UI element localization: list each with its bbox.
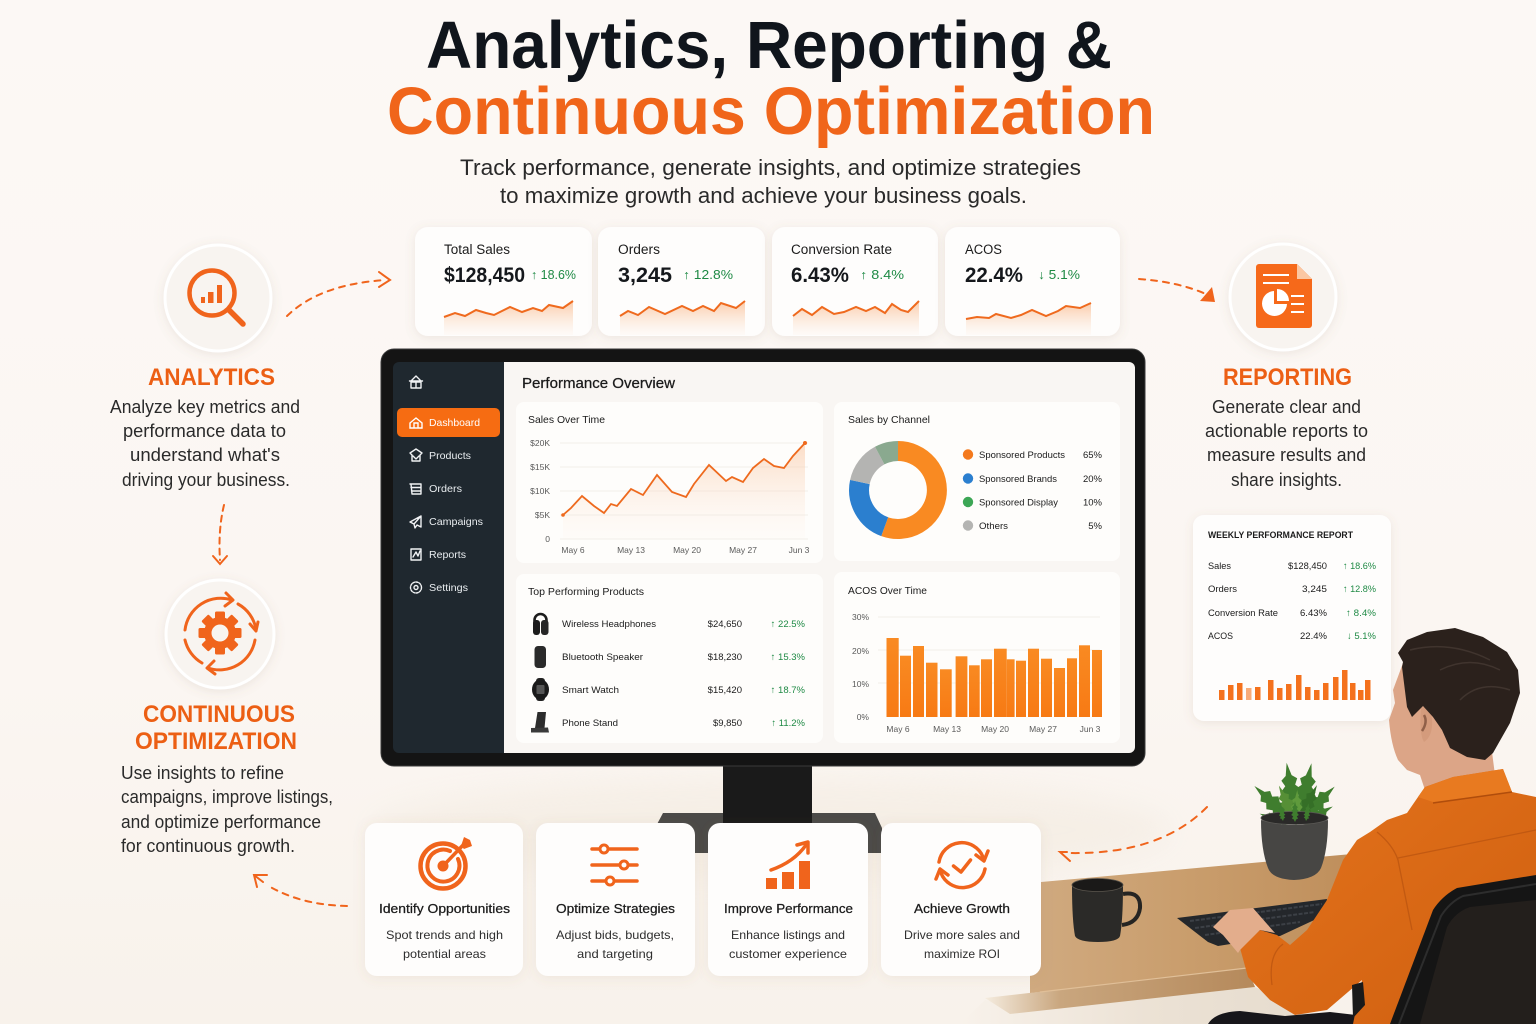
products nav: Products (429, 450, 471, 462)
product rows: Phone Stand (562, 718, 618, 729)
card: optimize strategies: Adjust bids, budgets, (556, 928, 674, 942)
heading: continuous optimization: CONTINUOUS (143, 701, 295, 728)
KPI card: orders (598, 227, 765, 336)
dashboard nav active (397, 408, 500, 437)
text: continuous optimization description: and optimize performance (121, 812, 321, 832)
heading: continuous optimization (135, 701, 297, 755)
panel: ACOS over time: 10% (852, 679, 869, 689)
report table: Conversion Rate (1208, 608, 1278, 619)
sidebar (393, 362, 504, 753)
heading: reporting: REPORTING (1223, 364, 1352, 391)
panel: top performing products: Top Performing Products (528, 586, 644, 598)
legend: Sponsored Products (979, 450, 1065, 461)
panel: sales over time: May 27 (729, 545, 757, 555)
panel: analytics (110, 245, 300, 490)
panel: sales over time: $5K (535, 510, 550, 520)
panel: sales over time: $20K (530, 438, 550, 448)
text: continuous optimization description: for continuous growth. (121, 836, 295, 856)
text: analytics description (110, 397, 300, 490)
monitor stand (655, 764, 882, 853)
person hand (1213, 908, 1275, 953)
panel: sales by channel (834, 402, 1120, 561)
card: improve performance: customer experience (729, 947, 847, 961)
panel: ACOS over time: 30% (852, 612, 869, 622)
KPI card: total sales: ↑ 18.6% (531, 268, 576, 282)
card: identify opportunities: Identify Opportunities (379, 902, 510, 916)
report table: ACOS (1208, 631, 1233, 642)
subtitle: to maximize growth and achieve your business goals. (500, 183, 1027, 208)
panel: ACOS over time (834, 572, 1120, 743)
product rows: ↑ 11.2% (771, 718, 806, 729)
panel: sales over time (516, 402, 823, 563)
product rows: $24,650 (708, 619, 742, 630)
legend: 20% (1083, 474, 1103, 485)
person hair (1398, 628, 1520, 760)
card: achieve growth: Achieve Growth (914, 902, 1010, 916)
product rows: Bluetooth Speaker (562, 652, 643, 663)
arrow: KPI cards to reporting (1139, 279, 1215, 302)
panel: ACOS over time: May 20 (981, 724, 1009, 734)
icon: growth chart (766, 842, 810, 889)
panel: sales over time: $15K (530, 462, 550, 472)
panel: sales over time: Sales Over Time (528, 414, 605, 426)
office chair (1352, 875, 1536, 1024)
legend: 65% (1083, 450, 1103, 461)
campaigns nav: Campaigns (429, 516, 483, 528)
report table: ↓ 5.1% (1347, 631, 1377, 642)
KPI card: total sales: Total Sales (444, 242, 510, 257)
text: analytics description: Analyze key metrics and (110, 397, 300, 417)
KPI card: total sales (415, 227, 592, 336)
product rows: Wireless Headphones (562, 619, 656, 630)
product rows: ↑ 18.7% (771, 685, 806, 696)
report table: ↑ 8.4% (1346, 608, 1377, 619)
KPI card: ACOS: ↓ 5.1% (1038, 268, 1080, 282)
product rows: ↑ 15.3% (771, 652, 806, 663)
text: analytics description: understand what's (130, 445, 280, 465)
panel: ACOS over time: 20% (852, 646, 869, 656)
card: improve performance: Enhance listings and (731, 928, 845, 942)
legend: 10% (1083, 498, 1103, 508)
person thigh (1208, 1011, 1356, 1024)
legend (963, 449, 1103, 532)
title (387, 8, 1155, 149)
panel: ACOS over time: ACOS Over Time (848, 585, 927, 597)
reports nav (411, 549, 466, 561)
text: reporting description: share insights. (1231, 470, 1342, 490)
heading: continuous optimization: OPTIMIZATION (135, 728, 297, 755)
text: continuous optimization description (121, 763, 333, 856)
icon: report document (1230, 244, 1336, 350)
card: identify opportunities: Spot trends and high (386, 928, 503, 942)
panel: sales over time: May 6 (561, 545, 585, 555)
orders nav (410, 483, 462, 495)
report table: ↑ 12.8% (1343, 584, 1377, 595)
legend: Others (979, 521, 1008, 532)
main content area (504, 362, 1135, 753)
legend: Sponsored Display (979, 498, 1058, 508)
icon: keyboard (1177, 899, 1327, 946)
panel: weekly performance report: WEEKLY PERFORMANCE REPORT (1208, 530, 1353, 541)
text: reporting description: measure results and (1207, 445, 1366, 465)
text: reporting description: Generate clear and (1212, 397, 1361, 417)
text: continuous optimization description: Use insights to refine (121, 763, 284, 783)
card: optimize strategies: and targeting (577, 947, 653, 961)
arrow: cards to continuous optimization (254, 875, 347, 906)
report table: 6.43% (1300, 608, 1328, 619)
card: optimize strategies (536, 823, 695, 976)
settings nav: Settings (429, 582, 468, 594)
icon: magnifier (165, 245, 271, 351)
product rows: $9,850 (713, 718, 742, 729)
panel: bottom step cards (365, 823, 1041, 976)
panel: sales over time: May 20 (673, 545, 701, 555)
icon: phone stand (531, 712, 549, 732)
KPI card: orders: ↑ 12.8% (683, 268, 733, 282)
KPI card: total sales: $128,450 (444, 264, 525, 287)
product rows: ↑ 22.5% (771, 619, 806, 630)
person ear (1420, 707, 1432, 742)
panel: sales over time: Jun 3 (789, 545, 810, 555)
product rows (562, 619, 806, 729)
text: reporting description (1205, 397, 1368, 490)
icon: headphones (533, 614, 548, 635)
icon: target (420, 837, 472, 888)
report table (1208, 561, 1377, 642)
panel: ACOS over time: May 27 (1029, 724, 1057, 734)
product rows: Smart Watch (562, 685, 619, 696)
heading: analytics: ANALYTICS (148, 364, 275, 391)
desk (960, 854, 1352, 1024)
ACOS bar chart (886, 638, 1102, 717)
text: analytics description: performance data to (123, 421, 286, 441)
card: improve performance: Improve Performance (724, 902, 853, 916)
panel: ACOS over time: May 6 (886, 724, 910, 734)
card: improve performance (708, 823, 868, 976)
KPI card: ACOS (945, 227, 1120, 336)
arrow: analytics to continuous optimization (213, 505, 227, 564)
title: Continuous Optimization (387, 74, 1155, 149)
KPI card: ACOS: 22.4% (965, 264, 1023, 287)
product rows: $18,230 (708, 652, 742, 663)
heading: performance overview: Performance Overview (522, 376, 676, 392)
legend: Sponsored Brands (979, 474, 1057, 485)
products nav (410, 449, 471, 462)
panel: top performing products (516, 574, 823, 743)
donut chart (859, 451, 937, 529)
panel: sales over time: $10K (530, 486, 550, 496)
reports nav: Reports (429, 549, 466, 561)
subtitle (460, 155, 1081, 208)
panel: sales over time: 0 (545, 534, 550, 544)
report table: ↑ 18.6% (1343, 561, 1377, 572)
icon: smart watch (532, 678, 549, 701)
icon: speaker (534, 646, 546, 668)
KPI card: conversion rate: Conversion Rate (791, 242, 892, 257)
legend: 5% (1088, 521, 1103, 532)
arrow: person to cards (1060, 807, 1207, 861)
card: identify opportunities: potential areas (403, 947, 486, 961)
icon: gear with cycle arrows (166, 580, 274, 688)
text: analytics description: driving your business. (122, 470, 290, 490)
title: Analytics, Reporting & (426, 8, 1112, 83)
KPI card: ACOS: ACOS (965, 242, 1002, 257)
card: achieve growth: Drive more sales and (904, 928, 1020, 942)
report bar chart (1219, 670, 1370, 700)
subtitle: Track performance, generate insights, and optimize strategies (460, 155, 1081, 180)
icon: cycle check (936, 843, 988, 888)
arrow: analytics to KPI cards (287, 272, 390, 316)
settings nav (410, 582, 468, 594)
panel: continuous optimization (121, 580, 333, 856)
panel: ACOS over time: May 13 (933, 724, 961, 734)
panel: reporting (1205, 244, 1368, 490)
panel: sales over time: May 13 (617, 545, 645, 555)
monitor (381, 349, 1145, 766)
KPI card: conversion rate: 6.43% (791, 264, 849, 287)
person shirt (1240, 769, 1536, 1024)
person neck and face (1389, 660, 1495, 790)
orders nav: Orders (429, 483, 462, 495)
report table: 22.4% (1300, 631, 1328, 642)
card: identify opportunities (365, 823, 523, 976)
KPI card: conversion rate: ↑ 8.4% (860, 268, 904, 282)
KPI card: orders: 3,245 (618, 264, 672, 287)
dashboard nav active: Dashboard (429, 417, 480, 429)
panel: ACOS over time: 0% (857, 712, 869, 722)
icon: potted plant (1248, 761, 1341, 880)
text: reporting description: actionable reports to (1205, 421, 1368, 441)
panel: KPI cards (415, 227, 1120, 336)
report table: 3,245 (1302, 584, 1327, 595)
card: optimize strategies: Optimize Strategies (556, 902, 675, 916)
panel: ACOS over time: Jun 3 (1080, 724, 1101, 734)
panel: weekly performance report (1193, 515, 1391, 721)
text: continuous optimization description: campaigns, improve listings, (121, 787, 333, 807)
card: achieve growth (881, 823, 1041, 976)
panel: sales by channel: Sales by Channel (848, 414, 930, 426)
report table: $128,450 (1288, 561, 1327, 572)
sidebar logo (410, 376, 422, 388)
report table: Sales (1208, 561, 1231, 572)
KPI card: conversion rate (772, 227, 938, 336)
KPI card: orders: Orders (618, 242, 660, 257)
person at desk (1208, 628, 1536, 1024)
icon: sliders (592, 845, 637, 885)
report table: Orders (1208, 584, 1237, 595)
product rows: $15,420 (708, 685, 742, 696)
icon: coffee mug (1072, 878, 1140, 942)
card: achieve growth: maximize ROI (924, 947, 1000, 961)
